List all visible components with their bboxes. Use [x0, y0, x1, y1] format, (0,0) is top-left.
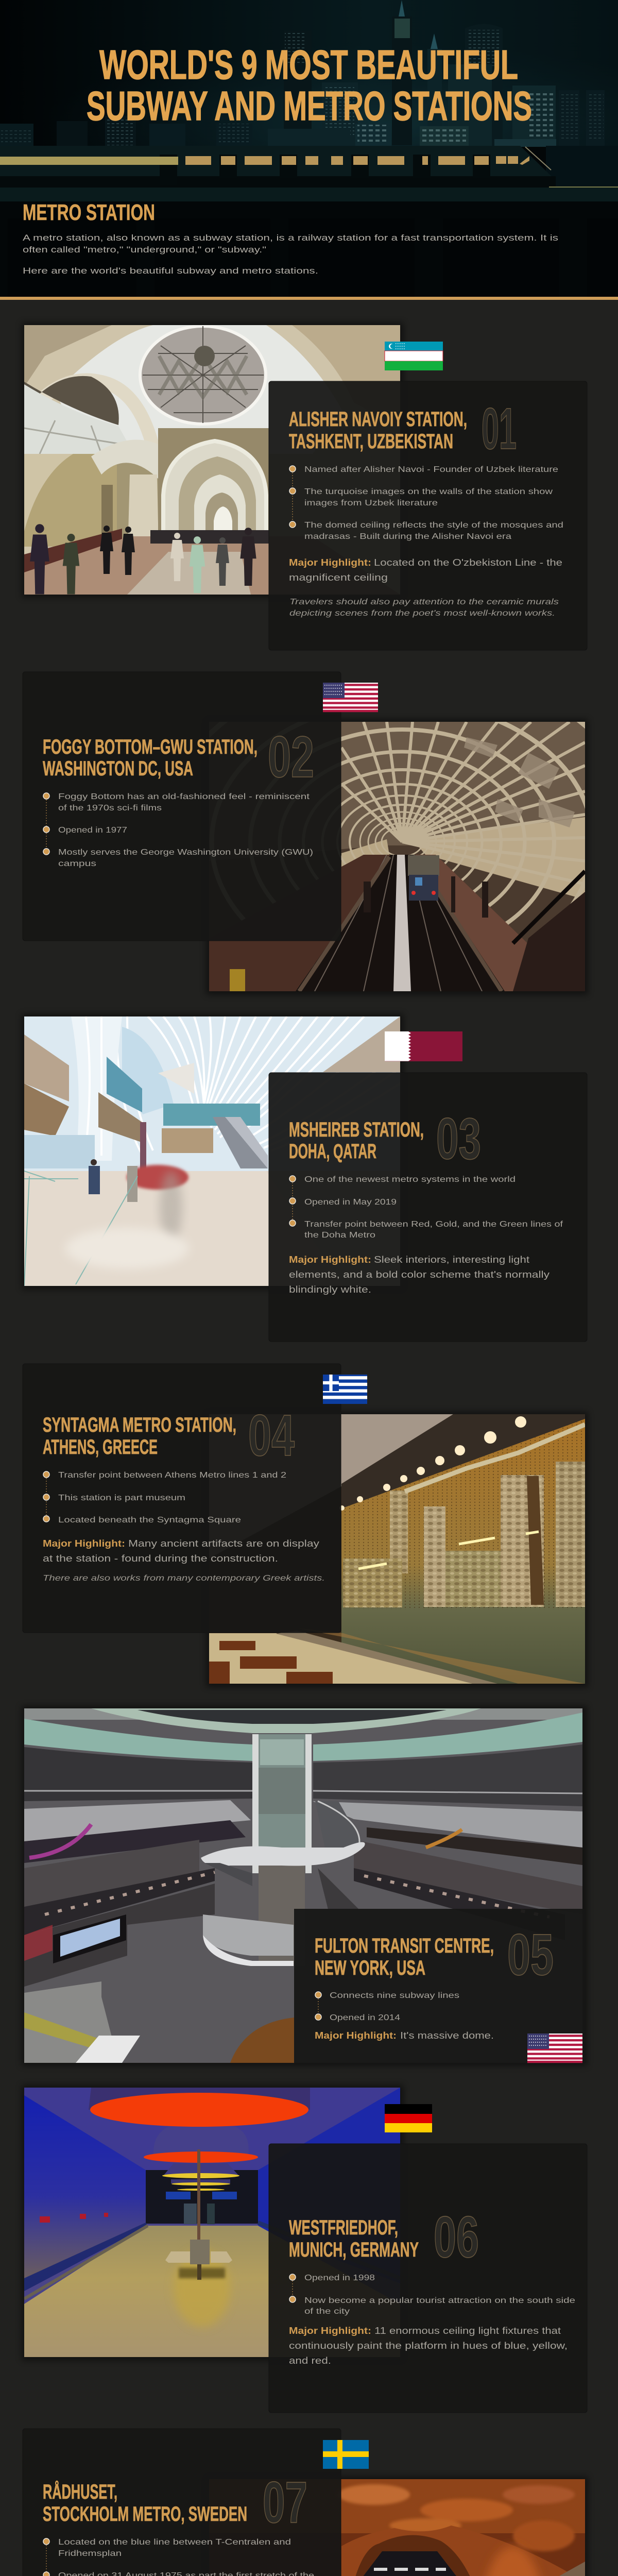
heading 06: MUNICH, GERMANY: [289, 2239, 419, 2261]
flag: Sweden: [323, 2440, 369, 2469]
bullet list 02: campus: [58, 859, 96, 868]
intro text: [23, 233, 558, 276]
bullet list 07: Located on the blue line between T-Centralen and: [58, 2538, 291, 2547]
elevated train: [0, 146, 556, 188]
photo shadow 02: [206, 719, 588, 995]
heading 06: WESTFRIEDHOF,: [289, 2216, 398, 2239]
bullet list 05: [315, 1991, 459, 2022]
section 01: Alisher Navoiy: [22, 323, 587, 650]
heading 07: [43, 2480, 247, 2526]
major highlight 03: blindingly white.: [289, 1284, 371, 1295]
intro text: A metro station, also known as a subway station, is a railway station for a fast transportation system. It is: [23, 233, 558, 243]
section 07: Radhuset: [23, 2429, 588, 2576]
heading 05: [315, 1935, 494, 1979]
heading 03: DOHA, QATAR: [289, 1140, 376, 1163]
bullet list 03: One of the newest metro systems in the world: [304, 1175, 516, 1184]
bullet list 01: Named after Alisher Navoi - Founder of Uzbek literature: [304, 465, 558, 474]
city skyline: [0, 0, 605, 147]
card 04: [23, 1364, 341, 1633]
note 01: depicting scenes from the poet's most well-known works.: [289, 609, 555, 618]
card 05: [294, 1909, 585, 2063]
heading 04: ATHENS, GREECE: [43, 1436, 158, 1459]
number 01: 01: [482, 396, 517, 461]
section 03: Msheireb: [22, 1014, 587, 1342]
bullet list 03: the Doha Metro: [304, 1231, 375, 1240]
major highlight 01: [289, 557, 562, 583]
major highlight 05: [315, 2030, 494, 2041]
bullet list 06: Now become a popular tourist attraction on the south side: [304, 2296, 575, 2305]
heading 05: FULTON TRANSIT CENTRE,: [315, 1935, 494, 1957]
intro text: often called "metro," "underground," or "subway.": [23, 245, 266, 255]
sky glow: [0, 0, 618, 146]
major highlight 01: magnificent ceiling: [289, 572, 388, 583]
bullet list 04: This station is part museum: [58, 1494, 185, 1502]
photo shadow 03: [22, 1014, 404, 1290]
flag: USA: [527, 2033, 582, 2063]
heading 02: [43, 736, 258, 780]
bullet list 02: Mostly serves the George Washington University (GWU): [58, 848, 313, 857]
card 06: [269, 2144, 587, 2413]
major highlight 01: Located on the O'zbekiston Line - the: [374, 557, 562, 568]
major highlight 06: 11 enormous ceiling light fixtures that: [374, 2326, 561, 2336]
heading 02: WASHINGTON DC, USA: [43, 757, 193, 780]
intro text: Here are the world's beautiful subway and metro stations.: [23, 266, 318, 276]
bullet list 01: madrasas - Built during the Alisher Navoi era: [304, 532, 511, 541]
bullet list 06: of the city: [304, 2307, 350, 2316]
right side dark: [546, 146, 618, 187]
bullet list 01: The turquoise images on the walls of the station show: [304, 487, 553, 496]
number 02: 02: [268, 724, 314, 789]
major highlight 05: It's massive dome.: [400, 2030, 494, 2041]
number 04: 04: [248, 1403, 295, 1468]
bullet list 05: Opened in 2014: [330, 2013, 400, 2022]
major highlight 03: [289, 1255, 550, 1295]
heading 01: ALISHER NAVOIY STATION,: [289, 408, 467, 431]
bullet list 02: Foggy Bottom has an old-fashioned feel - reminiscent: [58, 792, 310, 801]
major highlight 03: Major Highlight:: [289, 1255, 371, 1265]
photo shadow 04: [206, 1412, 588, 1687]
photo shadow 05: [22, 1706, 587, 2066]
section 06: Westfriedhof: [22, 2085, 587, 2413]
number 07: 07: [263, 2470, 307, 2535]
bullet list 01: images from Uzbek literature: [304, 499, 438, 507]
card 01: [269, 381, 587, 650]
number 03: 03: [436, 1106, 481, 1171]
elevated track: [0, 188, 618, 201]
major highlight 05: Major Highlight:: [315, 2030, 397, 2041]
intro heading: METRO STATION: [23, 200, 155, 225]
night sky: [0, 0, 618, 146]
major highlight 04: Major Highlight:: [43, 1538, 125, 1549]
heading 06: [289, 2216, 419, 2261]
photo shadow 06: [22, 2085, 404, 2361]
section 04: Syntagma: [23, 1364, 588, 1687]
heading 01: [289, 408, 467, 453]
heading 03: [289, 1118, 424, 1163]
bullet list 06: [289, 2274, 575, 2316]
card 03: [269, 1073, 587, 1342]
heading 04: [43, 1414, 236, 1459]
heading 07: RÅDHUSET,: [43, 2480, 117, 2503]
heading 07: STOCKHOLM METRO, SWEDEN: [43, 2503, 247, 2526]
photo: Msheireb station: [24, 1016, 400, 1286]
bullet list 04: Transfer point between Athens Metro lines 1 and 2: [58, 1471, 286, 1480]
major highlight 01: Major Highlight:: [289, 557, 371, 568]
bullet list 03: Transfer point between Red, Gold, and the Green lines of: [304, 1220, 563, 1229]
heading 04: SYNTAGMA METRO STATION,: [43, 1414, 236, 1436]
major highlight 06: [289, 2326, 568, 2366]
photo: Radhuset station: [338, 2479, 585, 2576]
flag: USA: [323, 683, 378, 712]
heading 05: NEW YORK, USA: [315, 1957, 425, 1979]
bullet list 07: Fridhemsplan: [58, 2549, 122, 2558]
photo: Foggy Bottom station: [209, 722, 585, 991]
major highlight 04: at the station - found during the construction.: [43, 1553, 278, 1564]
photo: Alisher Navoiy station: [24, 325, 400, 595]
note 01: [289, 598, 559, 618]
bullet list 06: Opened in 1998: [304, 2274, 375, 2282]
flag: Uzbekistan: [385, 342, 443, 370]
columns under track: [8, 218, 618, 297]
bullet list 07: [43, 2538, 314, 2576]
photo: Fulton Center: [24, 1708, 582, 2063]
photo: Syntagma station: [209, 1414, 585, 1684]
major highlight 04: Many ancient artifacts are on display: [128, 1538, 319, 1549]
flag: Qatar: [385, 1031, 462, 1061]
lit train windows: [185, 156, 529, 165]
photo shadow 07: [206, 2477, 588, 2576]
number 06: 06: [434, 2205, 479, 2269]
note 04: There are also works from many contemporary Greek artists.: [43, 1574, 325, 1583]
bullet list 03: Opened in May 2019: [304, 1198, 397, 1207]
major highlight 03: elements, and a bold color scheme that's normally: [289, 1269, 550, 1280]
flag: Greece: [323, 1375, 367, 1404]
bullet list 05: Connects nine subway lines: [330, 1991, 459, 2000]
card 07: [23, 2429, 341, 2576]
bullet list 04: [43, 1471, 286, 1524]
flag: Germany: [385, 2104, 432, 2132]
heading 01: TASHKENT, UZBEKISTAN: [289, 430, 453, 453]
photo shadow 01: [22, 323, 404, 598]
bullet list 04: Located beneath the Syntagma Square: [58, 1516, 241, 1524]
section 02: Foggy Bottom: [23, 672, 588, 994]
note 01: Travelers should also pay attention to the ceramic murals: [289, 598, 559, 606]
header panel: [0, 0, 618, 297]
bullet list 03: [289, 1175, 563, 1240]
bullet list 02: Opened in 1977: [58, 826, 127, 835]
bullet list 01: The domed ceiling reflects the style of the mosques and: [304, 521, 563, 530]
major highlight 06: Major Highlight:: [289, 2326, 371, 2336]
major highlight 03: Sleek interiors, interesting light: [374, 1255, 529, 1265]
section 05: Fulton: [22, 1706, 587, 2066]
bullet list 01: [289, 465, 563, 541]
train light trail: [0, 157, 178, 165]
photo: Westfriedhof station: [24, 2088, 400, 2357]
bullet list 02: of the 1970s sci-fi films: [58, 804, 162, 812]
bullet list 02: [43, 792, 313, 868]
major highlight 06: and red.: [289, 2355, 331, 2366]
heading 03: MSHEIREB STATION,: [289, 1118, 424, 1141]
major highlight 06: continuously paint the platform in hues of blue, yellow,: [289, 2341, 568, 2351]
gold divider bar: [0, 297, 618, 300]
number 05: 05: [507, 1922, 554, 1987]
card 02: [23, 672, 341, 941]
title: [87, 42, 532, 129]
major highlight 04: [43, 1538, 319, 1564]
heading 02: FOGGY BOTTOM–GWU STATION,: [43, 736, 258, 758]
